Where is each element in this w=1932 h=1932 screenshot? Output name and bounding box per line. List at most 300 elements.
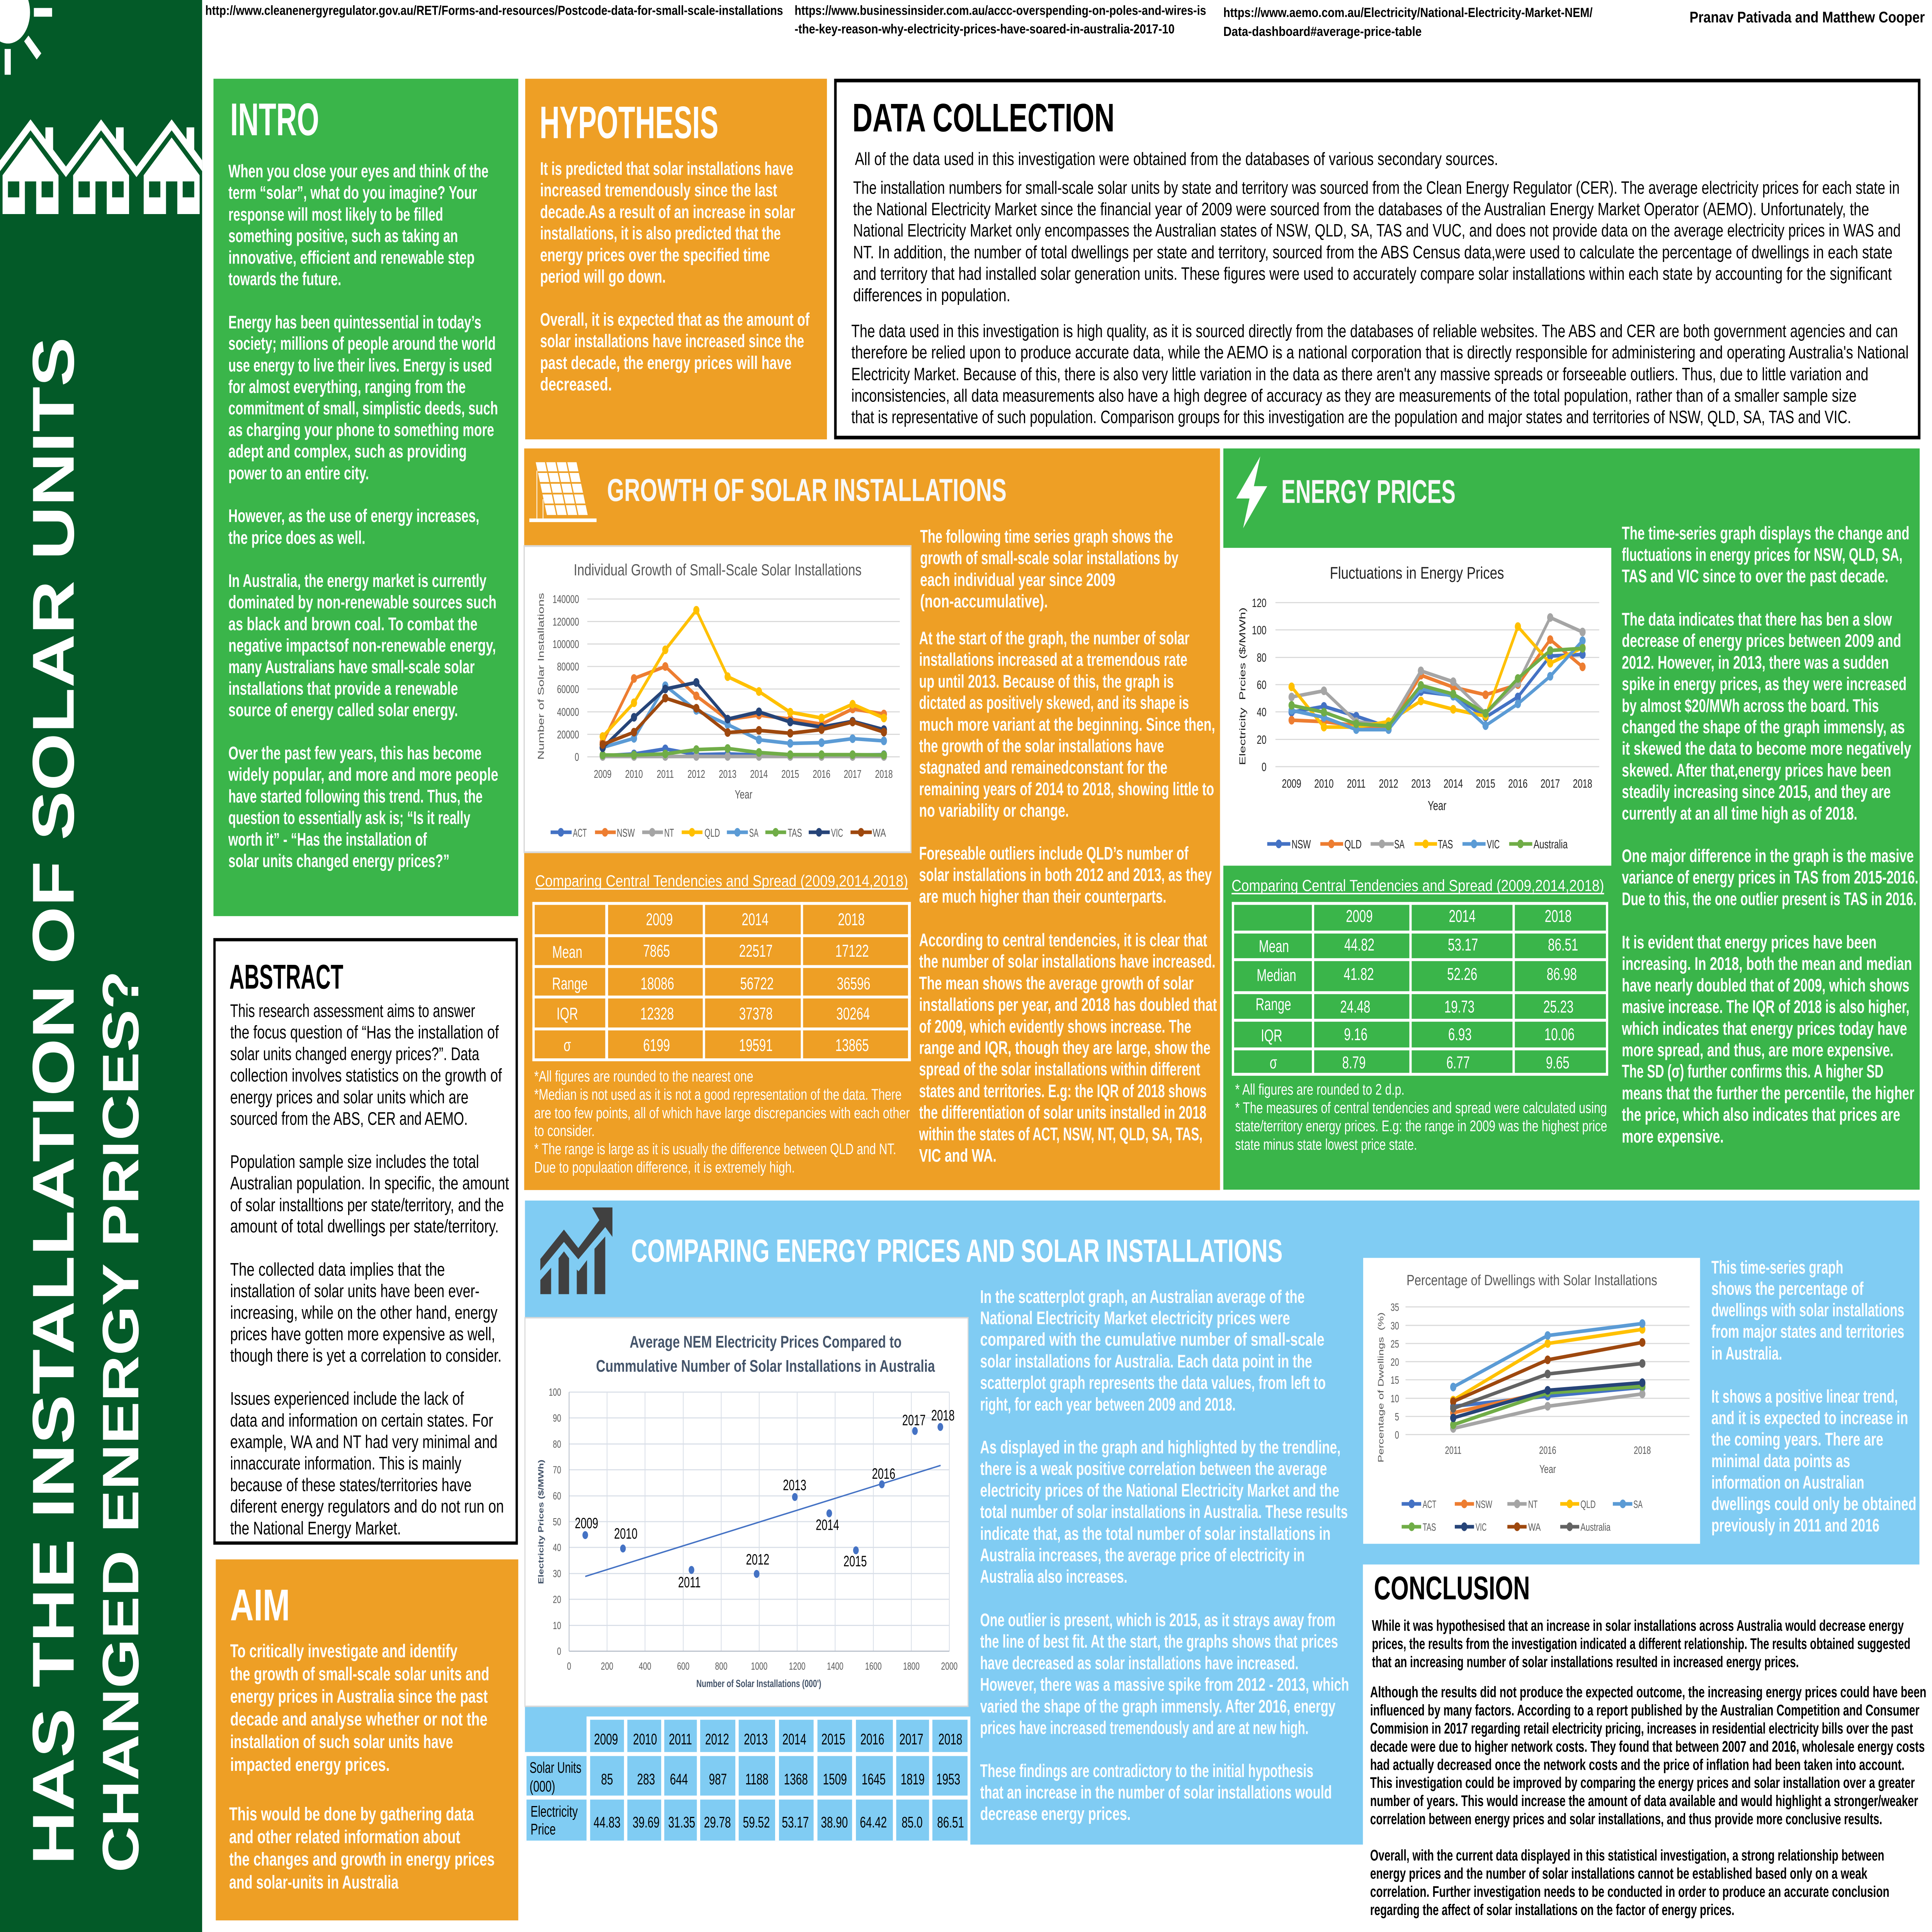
line chart: fluctuations in energy prices: 2009 bbox=[1282, 777, 1301, 790]
energy commentary text: fluctuations in energy prices for NSW, QLD, SA, bbox=[1622, 544, 1903, 565]
conclusion heading: CONCLUSION bbox=[1374, 1570, 1530, 1606]
energy commentary text: by almost $20/MWh across the board. This bbox=[1622, 696, 1879, 716]
energy commentary text: spike in energy prices, as they were increased bbox=[1622, 673, 1906, 694]
intro text: worth it” - “Has the installation of bbox=[228, 829, 427, 850]
scatterplot: NEM electricity prices vs cumulative solar installations: 600 bbox=[677, 1660, 689, 1672]
conclusion text: correlation between energy prices and solar installations, and thus provide more conclusive results. bbox=[1370, 1811, 1882, 1828]
line chart: fluctuations in energy prices: 2010 bbox=[1314, 777, 1333, 790]
dwellings commentary text: It shows a positive linear trend, bbox=[1711, 1386, 1898, 1406]
panel: hypothesis bbox=[525, 79, 827, 439]
intro text: Over the past few years, this has become bbox=[228, 743, 481, 764]
line chart: percentage of dwellings with solar installations: Percentage of Dwellings with Solar Installations bbox=[1406, 1272, 1657, 1288]
conclusion text bbox=[1370, 1617, 1926, 1918]
table: central tendencies of solar installations bbox=[532, 902, 911, 1061]
line chart: fluctuations in energy prices: 2014 bbox=[1444, 777, 1463, 790]
legend: TAS bbox=[788, 826, 802, 839]
growth commentary text: no variability or change. bbox=[919, 800, 1069, 821]
line chart: percentage of dwellings with solar installations: 2016 bbox=[1539, 1444, 1556, 1456]
table: central tendencies of solar installations: 2018 bbox=[838, 910, 865, 929]
growth commentary text: spread of the solar installations within different bbox=[919, 1059, 1201, 1079]
legend: NSW bbox=[617, 826, 635, 839]
table: central tendencies of energy prices: 86.98 bbox=[1547, 965, 1577, 984]
data collection text: inconsistencies, all data measurements also have a high degree of accuracy as they are measurements of the total population, rather than of a smaller sample size bbox=[851, 386, 1857, 406]
table: solar units and electricity price by year: 53.17 bbox=[782, 1814, 809, 1831]
energy commentary text: TAS and VIC since to over the past decade. bbox=[1622, 566, 1888, 586]
growth table footnotes: * The range is large as it is usually the difference between QLD and NT. bbox=[534, 1141, 896, 1158]
intro text: innovative, efficient and renewable step bbox=[228, 247, 474, 268]
growth heading: GROWTH OF SOLAR INSTALLATIONS bbox=[607, 473, 1007, 508]
intro text: adept and complex, such as providing bbox=[228, 441, 467, 461]
comparing commentary text: As displayed in the graph and highlighted by the trendline, bbox=[980, 1437, 1340, 1458]
scatterplot: NEM electricity prices vs cumulative solar installations: 2016 bbox=[872, 1466, 895, 1482]
line chart: fluctuations in energy prices: 2015 bbox=[1476, 777, 1495, 790]
growth commentary text: VIC and WA. bbox=[919, 1145, 997, 1166]
growth commentary text: much more variant at the beginning. Since then, bbox=[919, 714, 1215, 735]
table: solar units and electricity price by year: 64.42 bbox=[860, 1814, 887, 1831]
conclusion text: Although the results did not produce the expected outcome, the increasing energy prices could have been bbox=[1370, 1684, 1926, 1701]
table: central tendencies of solar installations: 13865 bbox=[835, 1036, 869, 1055]
line chart: individual growth of solar installations: 140000 bbox=[553, 593, 579, 605]
table: solar units and electricity price by year: 59.52 bbox=[743, 1814, 770, 1831]
line chart: individual growth of solar installations: 40000 bbox=[557, 706, 579, 719]
legend: ACT bbox=[573, 826, 587, 839]
line chart: percentage of dwellings with solar installations bbox=[1363, 1258, 1700, 1544]
scatterplot: NEM electricity prices vs cumulative solar installations: 2009 bbox=[575, 1515, 598, 1532]
table: central tendencies of solar installations: 6199 bbox=[643, 1036, 670, 1055]
abstract text: increasing, while on the other hand, energy bbox=[230, 1302, 498, 1323]
line chart: fluctuations in energy prices: 2016 bbox=[1508, 777, 1527, 790]
growth table footnotes: *All figures are rounded to the nearest one bbox=[534, 1068, 753, 1085]
scatterplot: NEM electricity prices vs cumulative solar installations: 70 bbox=[553, 1464, 561, 1476]
table: solar units and electricity price by year: 2011 bbox=[669, 1731, 692, 1748]
panel: conclusion bbox=[1370, 1570, 1926, 1918]
intro text: response will most likely to be filled bbox=[228, 204, 443, 224]
table: solar units and electricity price by year: 31.35 bbox=[668, 1814, 695, 1831]
table: central tendencies of solar installations: 30264 bbox=[836, 1004, 870, 1024]
table: central tendencies of energy prices: 41.82 bbox=[1344, 965, 1374, 984]
legend: ACT bbox=[1423, 1498, 1436, 1510]
energy commentary text: skewed. After that,energy prices have been bbox=[1622, 760, 1891, 781]
panel: energy prices bbox=[1223, 449, 1920, 1190]
main title: HAS THE INSTALLATION OF SOLAR UNITS bbox=[20, 337, 86, 1865]
dwellings commentary text: minimal data points as bbox=[1711, 1451, 1850, 1471]
intro text: installations that provide a renewable bbox=[228, 678, 458, 699]
conclusion text: Overall, with the current data displayed in this statistical investigation, a strong relationship between bbox=[1370, 1847, 1884, 1864]
line chart: individual growth of solar installations: 60000 bbox=[557, 683, 579, 696]
line chart: percentage of dwellings with solar installations: 35 bbox=[1391, 1301, 1399, 1313]
icon: rising chart with arrow bbox=[540, 1208, 612, 1294]
table: solar units and electricity price by year: 644 bbox=[670, 1771, 688, 1788]
scatterplot: NEM electricity prices vs cumulative solar installations: 2018 bbox=[931, 1408, 955, 1424]
scatterplot: NEM electricity prices vs cumulative solar installations: 2017 bbox=[902, 1412, 925, 1429]
abstract text: the National Energy Market. bbox=[230, 1518, 401, 1538]
table: central tendencies of energy prices: 53.17 bbox=[1448, 935, 1478, 954]
abstract text: energy prices and solar units which are bbox=[230, 1087, 468, 1107]
scatterplot: NEM electricity prices vs cumulative solar installations: 2010 bbox=[614, 1526, 638, 1542]
conclusion text: had actually decreased once the network costs and the price of inflation had been taken into account. bbox=[1370, 1757, 1905, 1774]
line chart: fluctuations in energy prices: 80 bbox=[1257, 651, 1267, 665]
legend: NT bbox=[1528, 1498, 1537, 1510]
growth commentary text: of 2009, which evidently shows increase. The bbox=[919, 1016, 1191, 1037]
line chart: fluctuations in energy prices bbox=[1223, 548, 1611, 866]
growth commentary text: (non-accumulative). bbox=[920, 591, 1048, 611]
line chart: percentage of dwellings with solar installations: Percentage of Dwellings (%) bbox=[1377, 1312, 1385, 1463]
abstract text: amount of total dwellings per state/territory. bbox=[230, 1216, 499, 1236]
icon: lightning bolt bbox=[1236, 456, 1267, 528]
table: central tendencies of energy prices: 25.23 bbox=[1543, 997, 1573, 1017]
intro text: as charging your phone to something more bbox=[228, 420, 494, 440]
abstract text: Issues experienced include the lack of bbox=[230, 1388, 464, 1409]
energy table footnotes: state/territory energy prices. E.g: the range in 2009 was the highest price bbox=[1235, 1118, 1607, 1135]
hypothesis text: period will go down. bbox=[540, 266, 666, 287]
comparing commentary text: scatterplot graph represents the data values, from left to bbox=[980, 1372, 1326, 1393]
table: central tendencies of solar installations: 2009 bbox=[646, 910, 673, 929]
table: central tendencies of energy prices: 86.51 bbox=[1548, 935, 1578, 954]
line chart: fluctuations in energy prices: 2013 bbox=[1411, 777, 1430, 790]
intro text: widely popular, and more and more people bbox=[228, 764, 498, 785]
scatterplot: NEM electricity prices vs cumulative solar installations: 1600 bbox=[865, 1660, 882, 1672]
line chart: percentage of dwellings with solar installations: 5 bbox=[1395, 1411, 1399, 1423]
scatterplot: NEM electricity prices vs cumulative solar installations: 30 bbox=[553, 1568, 561, 1579]
growth commentary text: within the states of ACT, NSW, NT, QLD, SA, TAS, bbox=[919, 1124, 1202, 1145]
line chart: fluctuations in energy prices: Year bbox=[1428, 799, 1446, 813]
line chart: fluctuations in energy prices: 2012 bbox=[1379, 777, 1398, 790]
intro text: term “solar”, what do you imagine? Your bbox=[228, 182, 477, 203]
aim text: installation of such solar units have bbox=[230, 1731, 453, 1752]
legend: VIC bbox=[1487, 837, 1500, 851]
table: central tendencies of solar installations: 36596 bbox=[837, 974, 871, 993]
line chart: individual growth of solar installations: 2015 bbox=[781, 768, 799, 781]
line chart: individual growth of solar installations: 20000 bbox=[557, 728, 579, 741]
line chart: fluctuations in energy prices: Electricity Prcies ($/MWh) bbox=[1238, 607, 1247, 765]
aim text: and solar-units in Australia bbox=[229, 1871, 399, 1893]
legend: NSW bbox=[1292, 837, 1311, 851]
comparing commentary text: Australia also increases. bbox=[980, 1566, 1128, 1587]
comparing commentary text: compared with the cumulative number of small-scale bbox=[980, 1329, 1325, 1350]
growth table heading: Comparing Central Tendencies and Spread (2009,2014,2018) bbox=[535, 872, 908, 890]
table: solar units and electricity price by year: 39.69 bbox=[633, 1814, 660, 1831]
icon: sun bbox=[0, 0, 52, 75]
dwellings commentary text: the coming years. There are bbox=[1711, 1429, 1883, 1449]
line chart: individual growth of solar installations: 100000 bbox=[553, 638, 579, 651]
line chart: percentage of dwellings with solar installations: 10 bbox=[1391, 1393, 1399, 1405]
intro text bbox=[228, 161, 498, 871]
comparing commentary text: indicate that, as the total number of solar installations in bbox=[980, 1523, 1331, 1544]
hypothesis heading: HYPOTHESIS bbox=[539, 97, 718, 148]
scatterplot: NEM electricity prices vs cumulative solar installations: 20 bbox=[553, 1594, 561, 1605]
line chart: fluctuations in energy prices: 40 bbox=[1257, 705, 1267, 719]
panel: growth of solar installations bbox=[524, 449, 1220, 1190]
line chart: percentage of dwellings with solar installations: 15 bbox=[1391, 1374, 1399, 1386]
table: central tendencies of solar installations: 22517 bbox=[739, 942, 773, 961]
line chart: fluctuations in energy prices: 120 bbox=[1252, 596, 1267, 610]
table: solar units and electricity price by year: 283 bbox=[637, 1771, 655, 1788]
scatterplot: NEM electricity prices vs cumulative solar installations: Electricity Prices ($/MWh) bbox=[537, 1459, 545, 1584]
scatterplot: NEM electricity prices vs cumulative solar installations: Cummulative Number of Solar Installations in Australia bbox=[596, 1357, 935, 1375]
table: central tendencies of energy prices: Mean bbox=[1259, 937, 1289, 956]
line chart: percentage of dwellings with solar installations: 30 bbox=[1391, 1320, 1399, 1332]
energy commentary text: increasing. In 2018, both the mean and median bbox=[1622, 953, 1912, 974]
line chart: fluctuations in energy prices: 0 bbox=[1262, 760, 1267, 774]
abstract text: because of these states/territories have bbox=[230, 1475, 471, 1495]
scatterplot: NEM electricity prices vs cumulative solar installations: 2014 bbox=[816, 1517, 839, 1534]
intro text: solar units changed energy prices?” bbox=[228, 850, 449, 871]
abstract text: diferent energy regulators and do not run on bbox=[230, 1496, 504, 1517]
line chart: individual growth of solar installations: 2013 bbox=[719, 768, 736, 781]
legend: VIC bbox=[831, 826, 843, 839]
intro text: Energy has been quintessential in today’s bbox=[228, 312, 481, 332]
scatterplot: NEM electricity prices vs cumulative solar installations: 800 bbox=[715, 1660, 728, 1672]
legend: TAS bbox=[1438, 837, 1453, 851]
energy commentary text: decrease of energy prices between 2009 and bbox=[1622, 630, 1901, 651]
intro text: for almost everything, ranging from the bbox=[228, 376, 466, 397]
table: central tendencies of energy prices: Range bbox=[1256, 995, 1291, 1014]
abstract text: sourced from the ABS, CER and AEMO. bbox=[230, 1108, 468, 1129]
intro text: In Australia, the energy market is currently bbox=[228, 571, 486, 591]
data collection text: differences in population. bbox=[853, 286, 1010, 305]
energy commentary text: means that the further the percentile, the higher bbox=[1622, 1083, 1914, 1103]
hypothesis text: Overall, it is expected that as the amount of bbox=[540, 309, 810, 330]
abstract heading: ABSTRACT bbox=[230, 958, 343, 996]
growth commentary text: range and IQR, though they are large, show the bbox=[919, 1037, 1211, 1058]
line chart: individual growth of solar installations: Number of Solar Installations bbox=[536, 593, 546, 760]
aim text: This would be done by gathering data bbox=[229, 1803, 474, 1824]
comparing commentary text: the line of best fit. At the start, the graphs shows that prices bbox=[980, 1631, 1338, 1651]
legend: QLD bbox=[1344, 837, 1362, 851]
hypothesis text: increased tremendously since the last bbox=[540, 180, 777, 200]
intro text: as black and brown coal. To combat the bbox=[228, 614, 478, 634]
dwellings commentary text: from major states and territories bbox=[1711, 1321, 1904, 1342]
growth commentary text: The following time series graph shows the bbox=[920, 526, 1173, 547]
abstract text: innaccurate information. This is mainly bbox=[230, 1453, 461, 1473]
abstract text: Population sample size includes the total bbox=[230, 1151, 479, 1172]
line chart: fluctuations in energy prices: 60 bbox=[1257, 678, 1267, 692]
panel: intro bbox=[213, 79, 518, 916]
conclusion text: Commision in 2017 regarding retail electricity pricing, increases in residential electricity bills over the past bbox=[1370, 1720, 1913, 1737]
data collection text: and territory that had installed solar generation units. These figures were used to accurately compare solar installations within each state by accounting for the significant bbox=[853, 264, 1892, 284]
intro text: society; millions of people around the world bbox=[228, 333, 496, 354]
hypothesis text: solar installations have increased since the bbox=[540, 331, 804, 351]
table: solar units and electricity price by year: 85.0 bbox=[901, 1814, 923, 1831]
comparing commentary text: there is a weak positive correlation between the average bbox=[980, 1458, 1327, 1479]
legend: QLD bbox=[704, 826, 720, 839]
abstract text: of solar installtions per state/territory, and the bbox=[230, 1195, 504, 1215]
panel: data collection bbox=[835, 80, 1919, 437]
scatterplot: NEM electricity prices vs cumulative solar installations: 1000 bbox=[751, 1660, 767, 1672]
legend bbox=[551, 826, 886, 839]
table: solar units and electricity price by year: 2015 bbox=[821, 1731, 845, 1748]
line chart: individual growth of solar installations: 2014 bbox=[750, 768, 768, 781]
abstract text: installation of solar units have been ever- bbox=[230, 1281, 480, 1301]
table: solar units and electricity price by year: 2009 bbox=[594, 1731, 618, 1748]
growth commentary text: At the start of the graph, the number of solar bbox=[919, 628, 1189, 648]
legend: Australia bbox=[1580, 1521, 1611, 1533]
scatterplot: NEM electricity prices vs cumulative solar installations: 60 bbox=[553, 1490, 561, 1502]
intro text: have started following this trend. Thus, the bbox=[228, 786, 483, 806]
legend: QLD bbox=[1580, 1498, 1595, 1510]
growth table footnotes: Due to populaation difference, it is extremely high. bbox=[534, 1159, 795, 1176]
abstract text: Australian population. In specific, the amount bbox=[230, 1173, 509, 1193]
table: solar units and electricity price by year: 85 bbox=[601, 1771, 613, 1788]
abstract text: the focus question of “Has the installation of bbox=[230, 1022, 499, 1043]
conclusion text: influenced by many factors. According to a report published by the Australian Competition and Consumer bbox=[1370, 1702, 1919, 1719]
panel: abstract bbox=[214, 940, 517, 1543]
growth commentary text: up until 2013. Because of this, the graph is bbox=[919, 671, 1174, 692]
dwellings commentary text: This time-series graph bbox=[1711, 1257, 1843, 1277]
line chart: individual growth of solar installations bbox=[524, 546, 911, 852]
energy commentary text: masive increase. The IQR of 2018 is also higher, bbox=[1622, 997, 1910, 1017]
energy commentary text: the price, which also indicates that prices are bbox=[1622, 1104, 1900, 1125]
table: central tendencies of energy prices: 6.77 bbox=[1446, 1053, 1470, 1073]
data collection text: The installation numbers for small-scale solar units by state and territory was sourced from the Clean Energy Regulator (CER). The average electricity prices for each state in bbox=[853, 178, 1900, 198]
scatterplot: NEM electricity prices vs cumulative solar installations: 80 bbox=[553, 1438, 561, 1450]
energy commentary text: variance of energy prices in TAS from 2015-2016. bbox=[1622, 867, 1918, 888]
source links: -the-key-reason-why-electricity-prices-have-soared-in-australia-2017-10 bbox=[794, 22, 1175, 36]
table: central tendencies of energy prices: 9.16 bbox=[1344, 1025, 1367, 1044]
scatterplot: NEM electricity prices vs cumulative solar installations: 0 bbox=[557, 1645, 561, 1657]
scatterplot: NEM electricity prices vs cumulative solar installations: 100 bbox=[549, 1386, 561, 1398]
growth commentary text: are much higher than their counterparts. bbox=[919, 886, 1167, 907]
conclusion text: energy prices and the number of solar installations cannot be established based only on a weak bbox=[1370, 1865, 1867, 1882]
energy commentary text: it skewed the data to become more negatively bbox=[1622, 738, 1912, 759]
comparing commentary text: right, for each year between 2009 and 2018. bbox=[980, 1394, 1236, 1415]
data collection text: Electricity Market. Because of this, there is also very little variation in the data as there aren't any massive spreads or forseeable outliers. Thus, due to little variation and bbox=[851, 365, 1868, 384]
line chart: individual growth of solar installations: 2017 bbox=[844, 768, 861, 781]
scatterplot: NEM electricity prices vs cumulative solar installations: Number of Solar Installations (000') bbox=[696, 1678, 821, 1689]
table: solar units and electricity price by year: 1509 bbox=[823, 1771, 847, 1788]
abstract text: data and information on certain states. For bbox=[230, 1410, 493, 1430]
line chart: individual growth of solar installations: 2012 bbox=[687, 768, 705, 781]
table: solar units and electricity price by year: 2014 bbox=[782, 1731, 806, 1748]
comparing commentary text: varied the shape of the graph immensly. After 2016, energy bbox=[980, 1696, 1335, 1716]
growth table footnotes: are too few points, all of which have large discrepancies with each other bbox=[534, 1105, 910, 1122]
intro text: something positive, such as taking an bbox=[228, 226, 458, 246]
legend: SA bbox=[749, 826, 759, 839]
data collection text: All of the data used in this investigation were obtained from the databases of various secondary sources. bbox=[855, 150, 1498, 169]
table: central tendencies of solar installations: 37378 bbox=[739, 1004, 773, 1024]
aim text: impacted energy prices. bbox=[230, 1754, 390, 1775]
table: central tendencies of solar installations: 7865 bbox=[643, 942, 670, 961]
line chart: fluctuations in energy prices: 20 bbox=[1257, 733, 1267, 747]
abstract text: example, WA and NT had very minimal and bbox=[230, 1432, 498, 1452]
growth commentary text: The mean shows the average growth of solar bbox=[919, 973, 1194, 993]
main title: CHANGED ENERGY PRICES? bbox=[92, 971, 149, 1872]
table: solar units and electricity price by year: 1819 bbox=[901, 1771, 925, 1788]
table: central tendencies of solar installations: 19591 bbox=[739, 1036, 773, 1055]
line chart: fluctuations in energy prices: Fluctuations in Energy Prices bbox=[1330, 563, 1504, 582]
intro text: dominated by non-renewable sources such bbox=[228, 592, 497, 612]
table: solar units and electricity price by year: 2013 bbox=[744, 1731, 768, 1748]
table: solar units and electricity price by year: 2012 bbox=[705, 1731, 729, 1748]
growth commentary text: installations increased at a tremendous rate bbox=[919, 649, 1187, 670]
source links: https://www.businessinsider.com.au/accc-overspending-on-poles-and-wires-is bbox=[794, 4, 1206, 18]
sidebar panel bbox=[0, 0, 202, 1932]
scatterplot: NEM electricity prices vs cumulative solar installations: 1400 bbox=[827, 1660, 844, 1672]
table: solar units and electricity price by year: 2010 bbox=[633, 1731, 657, 1748]
data collection text: that is representative of such population. Comparison groups for this investigation are the population and major states and territories of NSW, QLD, SA, TAS and VIC. bbox=[851, 407, 1851, 427]
energy commentary text: have nearly doubled that of 2009, which shows bbox=[1622, 975, 1910, 996]
table: central tendencies of energy prices: 2014 bbox=[1449, 907, 1476, 926]
comparing commentary text: These findings are contradictory to the initial hypothesis bbox=[980, 1760, 1313, 1781]
conclusion text: decade were due to higher network costs. They found that between 2007 and 2016, wholesale energy costs bbox=[1370, 1738, 1925, 1755]
line chart: individual growth of solar installations: 2018 bbox=[875, 768, 893, 781]
growth commentary text: remaining years of 2014 to 2018, showing little to bbox=[919, 779, 1214, 799]
line chart: percentage of dwellings with solar installations: 25 bbox=[1391, 1338, 1399, 1350]
comparing commentary text: National Electricity Market electricity prices were bbox=[980, 1308, 1290, 1328]
energy table heading: Comparing Central Tendencies and Spread (2009,2014,2018) bbox=[1231, 877, 1604, 895]
comparing heading: COMPARING ENERGY PRICES AND SOLAR INSTALLATIONS bbox=[631, 1233, 1282, 1269]
table: central tendencies of energy prices bbox=[1232, 902, 1608, 1076]
growth commentary text: stagnated and remainedconstant for the bbox=[919, 757, 1167, 777]
table: solar units and electricity price by year: 44.83 bbox=[594, 1814, 621, 1831]
data collection text: National Electricity Market only encompasses the Australian states of NSW, QLD, SA, TAS and VUC, and does not provide data on the average electricity prices in WAS and bbox=[853, 221, 1901, 241]
intro text: However, as the use of energy increases, bbox=[228, 505, 479, 526]
panel: comparing energy prices and solar installations bbox=[525, 1201, 1919, 1845]
dwellings commentary text: dwellings could only be obtained bbox=[1711, 1493, 1916, 1514]
line chart: percentage of dwellings with solar installations: 2018 bbox=[1634, 1444, 1651, 1456]
abstract text: prices have gotten more expensive as well, bbox=[230, 1324, 495, 1344]
energy commentary text: The SD (σ) further confirms this. A higher SD bbox=[1622, 1061, 1884, 1082]
comparing commentary text bbox=[980, 1286, 1349, 1824]
line chart: individual growth of solar installations: 2010 bbox=[625, 768, 643, 781]
energy prices heading: ENERGY PRICES bbox=[1281, 473, 1456, 510]
legend: SA bbox=[1394, 837, 1405, 851]
source links bbox=[205, 4, 1593, 39]
table: solar units and electricity price by year: 2016 bbox=[861, 1731, 884, 1748]
line chart: individual growth of solar installations: 2011 bbox=[657, 768, 674, 781]
conclusion text: regarding the affect of solar installations on the factor of energy prices. bbox=[1370, 1901, 1735, 1918]
growth commentary text: dictated as positively skewed, and its shape is bbox=[919, 692, 1189, 713]
growth table footnotes: *Median is not used as it is not a good representation of the data. There bbox=[534, 1086, 901, 1103]
legend bbox=[1267, 837, 1568, 851]
conclusion text: number of years. This would increase the amount of data available and would highlight a stronger/weaker bbox=[1370, 1793, 1918, 1810]
table: solar units and electricity price by year: 1188 bbox=[745, 1771, 769, 1788]
aim text bbox=[229, 1640, 495, 1893]
table: central tendencies of energy prices: 9.65 bbox=[1546, 1053, 1570, 1073]
intro text: negative impactsof non-renewable energy, bbox=[228, 635, 496, 656]
energy commentary text: It is evident that energy prices have been bbox=[1622, 932, 1877, 952]
dwellings commentary text: previously in 2011 and 2016 bbox=[1711, 1515, 1879, 1536]
table: solar units and electricity price by year: 2017 bbox=[900, 1731, 923, 1748]
comparing commentary text: total number of solar installations in Australia. These results bbox=[980, 1502, 1348, 1522]
line chart: fluctuations in energy prices: 2011 bbox=[1347, 777, 1366, 790]
growth table footnotes: to consider. bbox=[534, 1122, 595, 1139]
aim text: the changes and growth in energy prices bbox=[229, 1849, 495, 1870]
table: central tendencies of solar installations: 12328 bbox=[640, 1004, 674, 1024]
intro text: When you close your eyes and think of the bbox=[228, 161, 488, 182]
growth commentary text: each individual year since 2009 bbox=[920, 570, 1115, 590]
scatterplot: NEM electricity prices vs cumulative solar installations: 2013 bbox=[783, 1477, 806, 1494]
scatterplot: NEM electricity prices vs cumulative solar installations: 2000 bbox=[941, 1660, 957, 1672]
dwellings commentary text: dwellings with solar installations bbox=[1711, 1300, 1904, 1320]
line chart: fluctuations in energy prices: 2018 bbox=[1573, 777, 1592, 790]
line chart: individual growth of solar installations: 80000 bbox=[557, 661, 579, 673]
line chart: individual growth of solar installations: 2009 bbox=[594, 768, 612, 781]
energy commentary text: Due to this, the one outlier present is TAS in 2016. bbox=[1622, 889, 1917, 909]
intro text: question to essentially ask is; “Is it really bbox=[228, 808, 470, 828]
abstract text: solar units changed energy prices?”. Data bbox=[230, 1044, 480, 1064]
comparing commentary text: One outlier is present, which is 2015, as it strays away from bbox=[980, 1610, 1335, 1630]
scatterplot: NEM electricity prices vs cumulative solar installations: Average NEM Electricity Prices Compared to bbox=[629, 1332, 901, 1351]
table: central tendencies of energy prices: 2018 bbox=[1545, 907, 1571, 926]
hypothesis text: It is predicted that solar installations have bbox=[540, 158, 793, 179]
conclusion text: that an increasing number of solar installations resulted in increased energy prices. bbox=[1372, 1654, 1799, 1671]
aim text: To critically investigate and identify bbox=[230, 1640, 457, 1662]
table: central tendencies of energy prices: 24.48 bbox=[1340, 997, 1370, 1017]
dwellings commentary text: information on Australian bbox=[1711, 1472, 1864, 1493]
table: central tendencies of solar installations: σ bbox=[563, 1036, 571, 1055]
comparing commentary text: solar installations for Australia. Each data point in the bbox=[980, 1351, 1312, 1371]
